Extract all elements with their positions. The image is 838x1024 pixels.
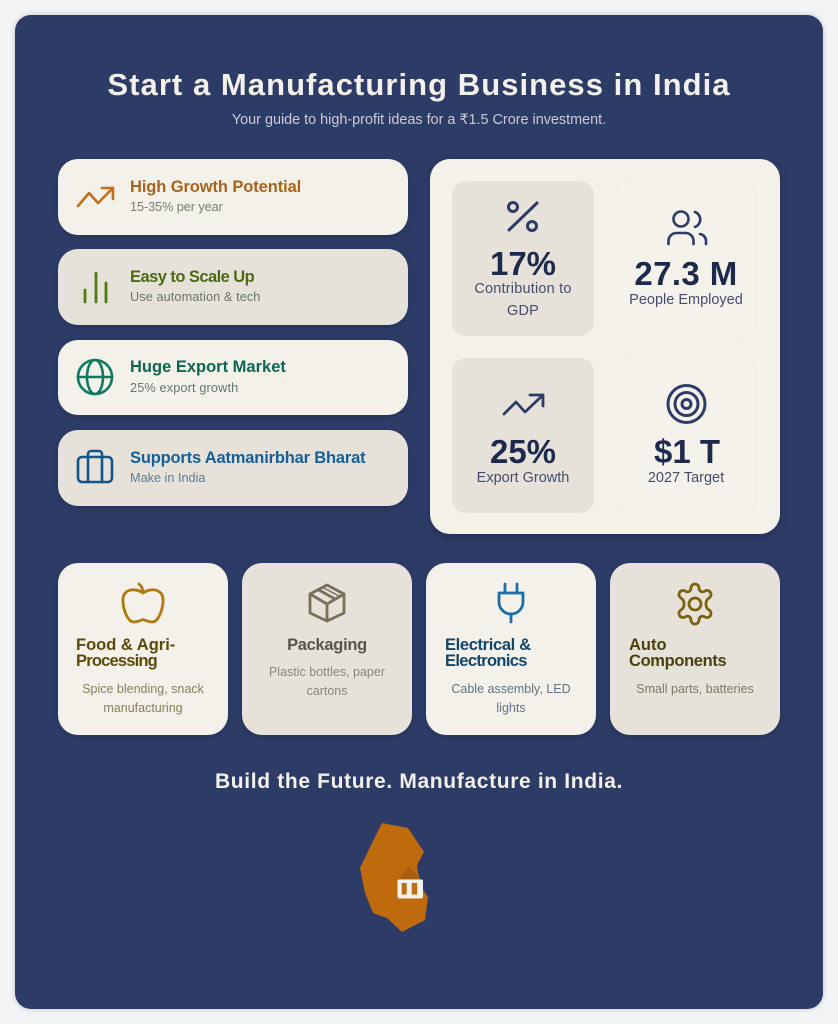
icon: percent: [507, 201, 539, 232]
label: People Employed: [629, 292, 743, 308]
heading: High Growth Potential: [130, 178, 301, 196]
heading: Auto: [629, 636, 667, 654]
label: [474, 281, 572, 319]
title: Start a Manufacturing Business in India: [107, 67, 731, 102]
card: huge export market: [58, 340, 408, 415]
heading: [629, 636, 726, 670]
text: 25% export growth: [130, 381, 238, 395]
icon: bar chart: [84, 272, 108, 304]
label: GDP: [507, 303, 539, 319]
icon: target: [666, 384, 706, 424]
text: 15-35% per year: [130, 200, 223, 214]
heading: Electronics: [445, 652, 527, 670]
text: Make in India: [130, 471, 205, 485]
icon: trending up: [502, 394, 544, 416]
stat: export growth: [452, 358, 594, 513]
icon: briefcase: [76, 450, 114, 484]
text: Plastic bottles, paper cartons: [269, 665, 385, 698]
label: Export Growth: [477, 470, 569, 486]
heading: Huge Export Market: [130, 358, 286, 376]
number: 17%: [490, 245, 556, 282]
card: supports aatmanirbhar bharat: [58, 430, 408, 506]
number: 25%: [490, 433, 556, 470]
icon: trending up: [76, 186, 114, 208]
heading: [445, 636, 531, 670]
text: Use automation & tech: [130, 290, 260, 304]
number: $1 T: [654, 433, 720, 470]
number: 27.3 M: [634, 255, 738, 292]
panel: statistics: [430, 159, 780, 534]
label: Contribution to: [474, 281, 572, 297]
card: food and agri-processing: [58, 563, 228, 735]
card: packaging: [242, 563, 412, 735]
stat: GDP contribution: [452, 181, 594, 336]
icon: gear: [678, 582, 712, 626]
heading: Supports Aatmanirbhar Bharat: [130, 449, 365, 467]
text: Spice blending, snack manufacturing: [82, 682, 204, 715]
card: electrical and electronics: [426, 563, 596, 735]
heading: Processing: [76, 652, 157, 670]
heading: Food & Agri-: [76, 636, 175, 654]
heading: Components: [629, 652, 726, 670]
card: high growth potential: [58, 159, 408, 235]
footer tagline: Build the Future. Manufacture in India.: [215, 770, 623, 793]
text: Small parts, batteries: [636, 682, 754, 696]
stat: people employed: [618, 181, 754, 336]
heading: Electrical &: [445, 636, 531, 654]
card: auto components: [610, 563, 780, 735]
icon: box: [308, 584, 346, 622]
icon: india map with factory: [360, 823, 428, 932]
icon: globe: [76, 358, 114, 396]
label: 2027 Target: [648, 470, 724, 486]
heading: Easy to Scale Up: [130, 268, 254, 286]
card: easy to scale up: [58, 249, 408, 325]
icon: apple: [122, 582, 164, 624]
text: Cable assembly, LED lights: [451, 682, 571, 715]
icon: plug: [498, 582, 524, 624]
heading: Packaging: [287, 636, 367, 654]
subtitle: Your guide to high-profit ideas for a ₹1.5 Crore investment.: [232, 112, 606, 128]
icon: users: [667, 210, 708, 246]
stat: 2027 target: [618, 358, 754, 513]
heading: [76, 636, 175, 670]
